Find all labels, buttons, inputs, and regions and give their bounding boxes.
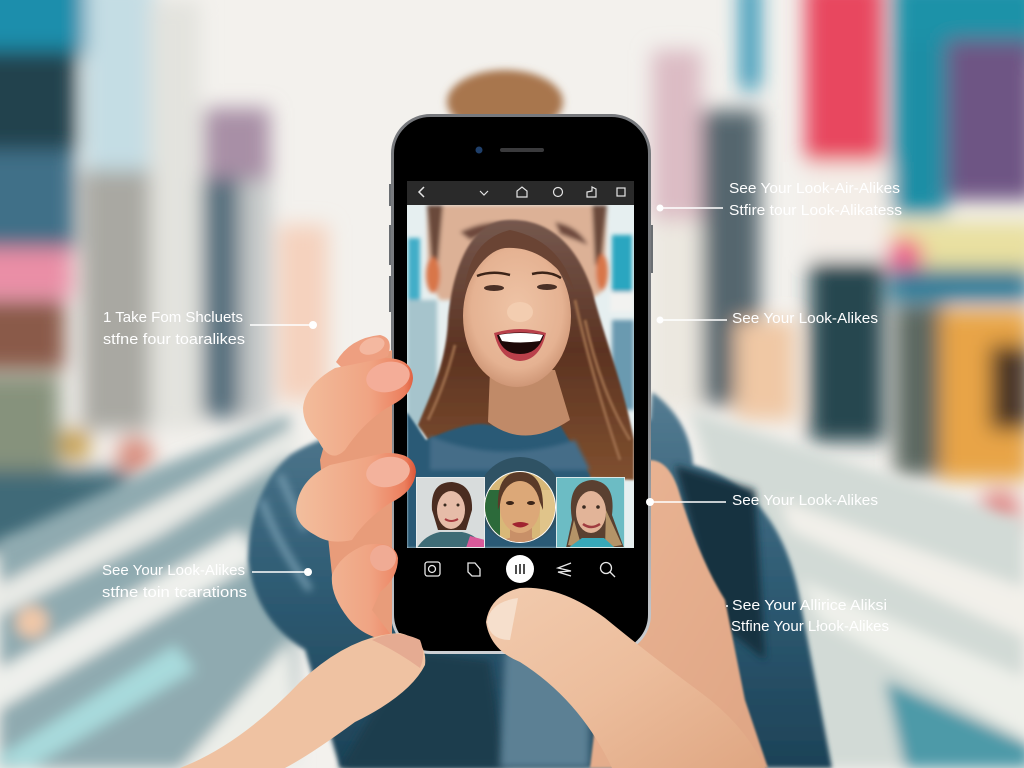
- callout: upper middle right: [656, 311, 878, 327]
- callout: lower middle right: See Your Look-Alikes: [732, 493, 878, 509]
- woman's face: [463, 245, 571, 387]
- nose: [507, 302, 533, 322]
- thumb nail: [372, 634, 423, 668]
- callout: bottom left: See Your Look-Alikes: [102, 563, 245, 579]
- callout: top left: [103, 310, 317, 348]
- icon: capture button: [506, 555, 534, 583]
- index finger: [303, 358, 413, 456]
- icon: share: [558, 563, 571, 576]
- road right: [690, 410, 1024, 768]
- callout: bottom right: Stfine Your Lłook-Alikes: [731, 619, 889, 635]
- look-alike thumbnails: [416, 470, 625, 550]
- backpack strap: [675, 465, 765, 660]
- person's hair: [447, 70, 563, 134]
- hood ring: [484, 457, 556, 542]
- right thumb: [486, 588, 765, 768]
- callout: bottom right: See Your Allirice Aliksi: [732, 598, 887, 614]
- speaker: [500, 148, 544, 152]
- callout: top right: See Your Look-Air-Alikes: [729, 181, 900, 197]
- hoodie in photo: [407, 412, 600, 548]
- callout: lower middle right: [646, 493, 878, 509]
- hoodie centre and shirt: [340, 650, 505, 768]
- sleeve folds: [262, 475, 310, 590]
- screen photo: [407, 205, 634, 548]
- thumbnail left: [416, 477, 485, 548]
- road left: [0, 415, 300, 768]
- phone body: [392, 116, 650, 652]
- lower-left thumb: [180, 633, 425, 768]
- thumbnail right: [556, 477, 625, 548]
- right hand behind phone: [590, 460, 768, 768]
- photo background: [407, 235, 634, 430]
- callout: upper middle right: See Your Look-Alikes: [732, 311, 878, 327]
- icon: gallery: [425, 562, 440, 576]
- middle finger: [296, 453, 416, 542]
- icon: search: [600, 562, 615, 577]
- callout: top right: [656, 181, 902, 219]
- app top bar: [407, 181, 634, 205]
- left hand holding phone: [296, 334, 416, 642]
- callout: bottom right: [726, 598, 889, 635]
- phone: [389, 116, 653, 652]
- hair strands: [428, 300, 630, 460]
- man's blurred face: [426, 205, 608, 300]
- callout: bottom left: [102, 563, 312, 601]
- icon: copy: [468, 563, 480, 576]
- callout: top right: Stfire tour Look-Alikatess: [729, 203, 902, 219]
- callout: top left: 1 Take Fom Shcluets: [103, 310, 243, 326]
- thumbnail nail: [487, 598, 518, 640]
- finger behind: [336, 334, 390, 376]
- ring finger: [332, 544, 398, 640]
- woman's hair: [418, 220, 634, 480]
- jacket: [248, 392, 832, 768]
- palm: [320, 350, 392, 642]
- thumbnail centre: [484, 470, 556, 550]
- neck: [488, 370, 570, 436]
- callout: bottom left: stfne toin tcarations: [102, 585, 247, 601]
- callout: top left: stfne four toaralikes: [103, 332, 245, 348]
- bottom toolbar icons: [425, 555, 615, 583]
- eyes and brows: [477, 273, 561, 291]
- mouth: [494, 329, 546, 361]
- front camera: [476, 146, 482, 154]
- fringe: [468, 230, 568, 283]
- side buttons: [389, 184, 653, 312]
- person behind the phone: [248, 70, 832, 768]
